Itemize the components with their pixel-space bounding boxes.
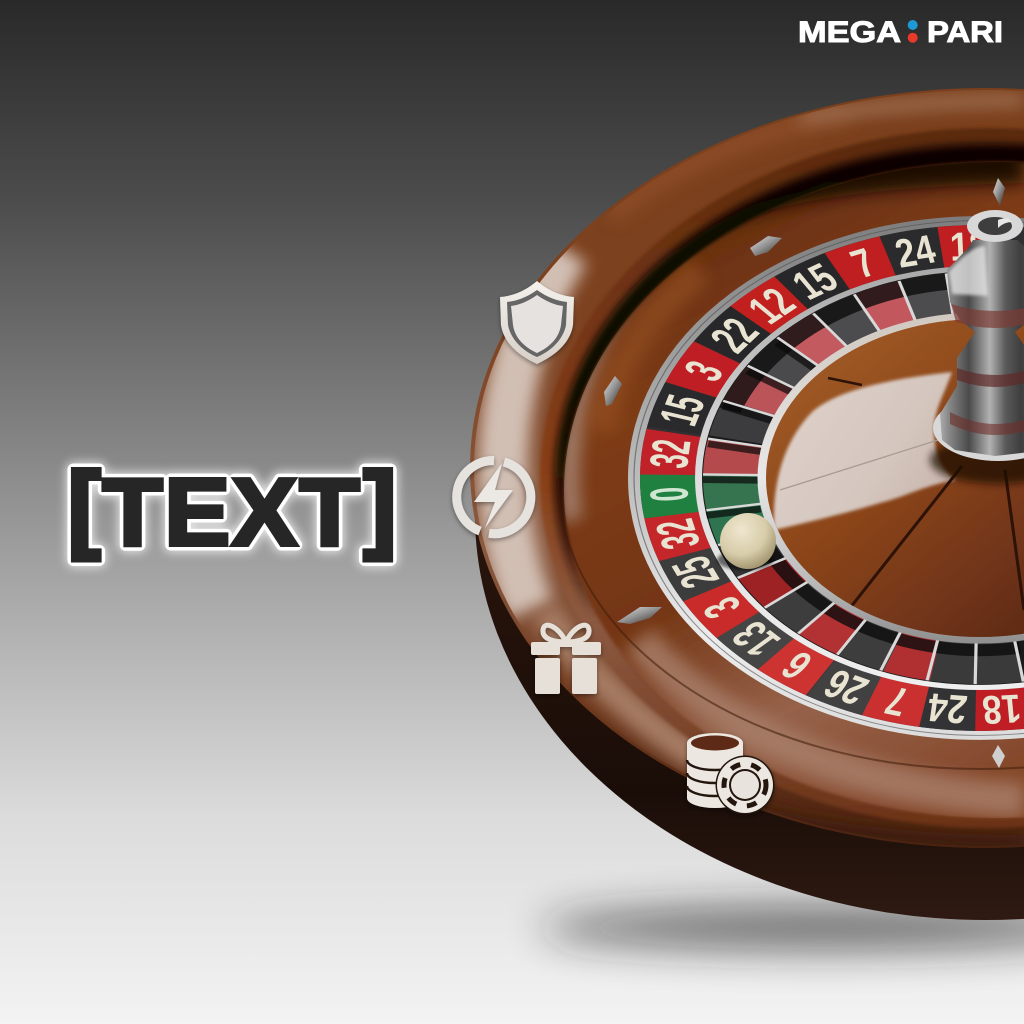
diamond marker <box>993 178 1005 206</box>
diamond marker <box>750 236 782 256</box>
pockets <box>702 271 1024 685</box>
segment 0 green: 0 <box>639 485 700 503</box>
dark letters: TEXT <box>102 458 360 566</box>
title text with glow <box>68 452 396 566</box>
segment top red <box>937 223 1001 270</box>
roulette wheel <box>470 88 1024 920</box>
pocket dividers <box>703 343 818 515</box>
segment 26 <box>805 656 887 717</box>
segment 13: 13 <box>722 613 791 664</box>
segment 7 top: 7 <box>843 240 884 287</box>
silver ring between numbers and pockets <box>699 269 1024 687</box>
white outline: ] <box>364 452 396 561</box>
logo dot red <box>908 33 918 43</box>
dark letters: ] <box>364 452 396 561</box>
rim inner wall <box>540 128 1024 828</box>
segment 25 <box>655 542 736 603</box>
number segments <box>637 223 1024 733</box>
segment 24 lower <box>914 684 981 733</box>
inner silver ring <box>762 316 1024 640</box>
dark letters: [ <box>68 452 100 561</box>
icon: shield <box>500 281 574 364</box>
wooden bowl <box>766 319 1024 637</box>
logo dot blue <box>908 20 918 30</box>
wooden deck <box>558 162 1024 818</box>
segment 26: 26 <box>816 660 877 713</box>
segment 32 lower <box>641 506 714 562</box>
logo <box>798 16 1003 49</box>
segment 3 lower <box>679 576 764 639</box>
icon: lightning in circle <box>457 460 531 534</box>
segment 3 lower: 3 <box>691 589 752 626</box>
segment top red: 18 <box>949 223 989 269</box>
pocket shading <box>730 280 1024 650</box>
segment 7 top <box>824 234 904 293</box>
segment 6: 6 <box>772 643 823 687</box>
diamonds on deck <box>604 178 1005 768</box>
center turret <box>930 210 1024 484</box>
ball <box>717 513 776 570</box>
diamond marker <box>992 745 1005 768</box>
logo word PARI: PARI <box>927 16 1003 49</box>
white outline: [ <box>68 452 100 561</box>
segment 15 left <box>644 382 720 439</box>
segment 32 upper <box>637 429 703 479</box>
segment 24 top <box>879 225 952 278</box>
diamond marker <box>604 376 622 406</box>
segment 15 left: 15 <box>647 390 717 430</box>
glow: [ <box>68 452 100 561</box>
segment 24 top: 24 <box>890 226 940 276</box>
segment 7 lower: 7 <box>880 677 914 724</box>
diamond marker <box>617 607 662 624</box>
ground shadow <box>540 906 1024 950</box>
segment 0 green <box>637 470 701 519</box>
segment 32 upper: 32 <box>638 437 702 470</box>
segment 15 top <box>774 251 857 313</box>
glow: TEXT <box>102 458 360 566</box>
icon: coin stack and poker chip <box>687 733 774 814</box>
rim face <box>470 88 1024 850</box>
segment 3 upper <box>663 340 745 402</box>
segment 12 <box>729 274 815 338</box>
segment 22 <box>691 303 778 367</box>
segment 25: 25 <box>659 550 731 595</box>
segment 12: 12 <box>738 280 806 332</box>
logo word MEGA: MEGA <box>798 16 901 49</box>
white outline: TEXT <box>102 458 360 566</box>
segment 7 lower <box>859 673 935 728</box>
segment 22: 22 <box>698 310 770 361</box>
segment 6 <box>755 633 840 696</box>
outer silver ring <box>635 221 1024 735</box>
segment 24 lower: 24 <box>925 685 970 732</box>
glow: ] <box>364 452 396 561</box>
segment 15 top: 15 <box>783 256 848 309</box>
segment 18: 18 <box>980 686 1023 733</box>
segment 32 lower: 32 <box>644 515 712 553</box>
segment 3 upper: 3 <box>673 354 735 388</box>
icon: gift box <box>531 625 601 694</box>
segment 13 <box>714 607 799 670</box>
wheel body <box>475 110 1024 920</box>
number track and pockets <box>634 221 1024 735</box>
